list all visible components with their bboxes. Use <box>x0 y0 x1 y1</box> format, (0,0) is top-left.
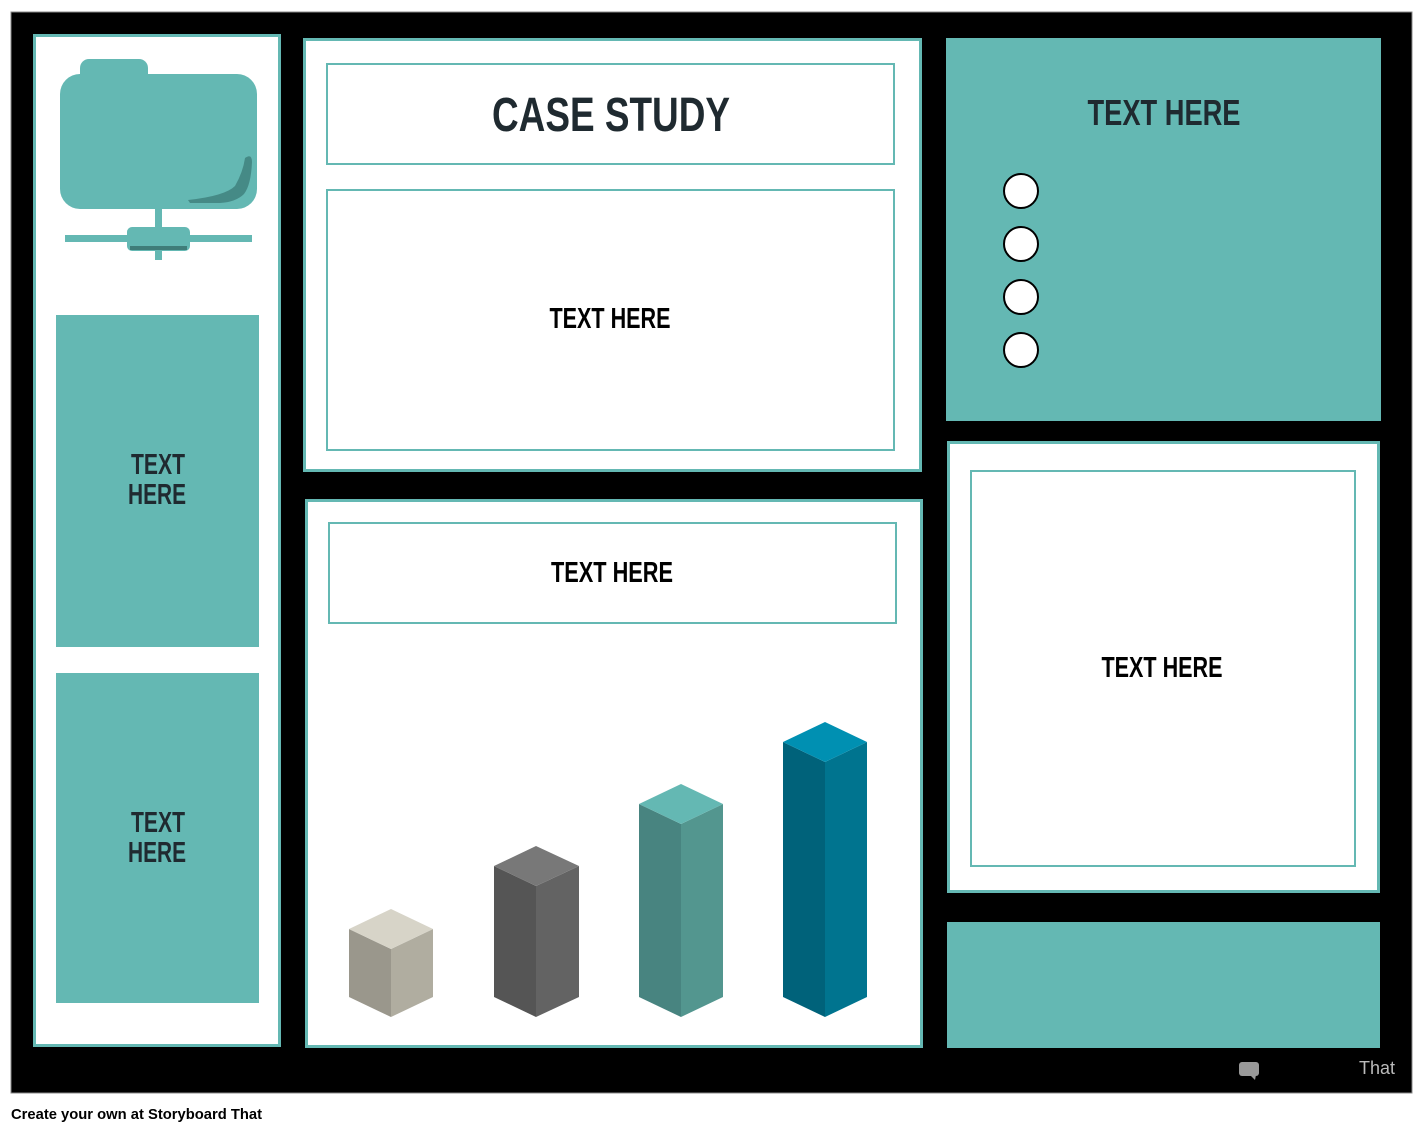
panel: right middle <box>948 442 1378 892</box>
text box: left 1: HERE <box>128 479 186 511</box>
text box: left 1: TEXT <box>131 449 185 481</box>
text block: center <box>327 190 894 450</box>
panel: chart <box>306 500 922 1046</box>
footer: Create your own at Storyboard That <box>11 1106 262 1123</box>
text block: center: TEXT HERE <box>550 303 670 335</box>
text box: left 2: HERE <box>128 837 186 869</box>
bullets <box>1004 174 1038 367</box>
panel: left column <box>34 36 280 1046</box>
watermark <box>1239 1058 1395 1080</box>
panel: right top list: TEXT HERE <box>1088 92 1240 133</box>
chart heading: TEXT HERE <box>551 557 673 589</box>
bar chart <box>349 722 867 1017</box>
panel: right top list <box>946 38 1381 421</box>
title: CASE STUDY <box>492 89 730 142</box>
panel: center top <box>304 40 920 470</box>
panel: right bottom <box>947 922 1380 1048</box>
text box: left 2: TEXT <box>131 807 185 839</box>
title <box>327 64 894 164</box>
watermark: That <box>1359 1058 1395 1078</box>
text box: left 2 <box>56 673 259 1003</box>
text box: left 1 <box>56 315 259 647</box>
chart heading <box>329 523 896 623</box>
panel: right middle: TEXT HERE <box>1102 652 1222 684</box>
icon: network folder <box>60 59 257 260</box>
